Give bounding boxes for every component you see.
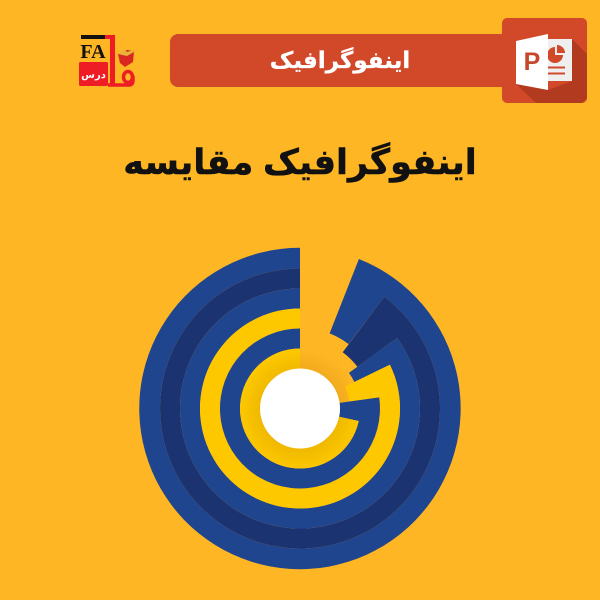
ring 4: yellow [200,308,400,508]
ring 3: blue [180,288,420,528]
ring 5: blue [220,328,380,489]
logo: FA dars [79,35,134,86]
logo: FA dars: FA [80,41,106,63]
logo: FA dars: درس [81,70,106,81]
chart: radial comparison [139,248,461,569]
header label: اینفوگرافیک [270,47,410,74]
ring 1: outer blue [139,248,461,569]
ring 6: yellow [240,348,359,469]
icon: PowerPoint [502,18,587,103]
header banner [170,34,515,87]
title: اینفوگرافیک مقایسه [123,142,477,183]
ring 2: dark blue [160,268,440,548]
hub: white circle [260,368,340,448]
hub shadow [240,348,359,469]
icon: PowerPoint: P [524,48,540,76]
